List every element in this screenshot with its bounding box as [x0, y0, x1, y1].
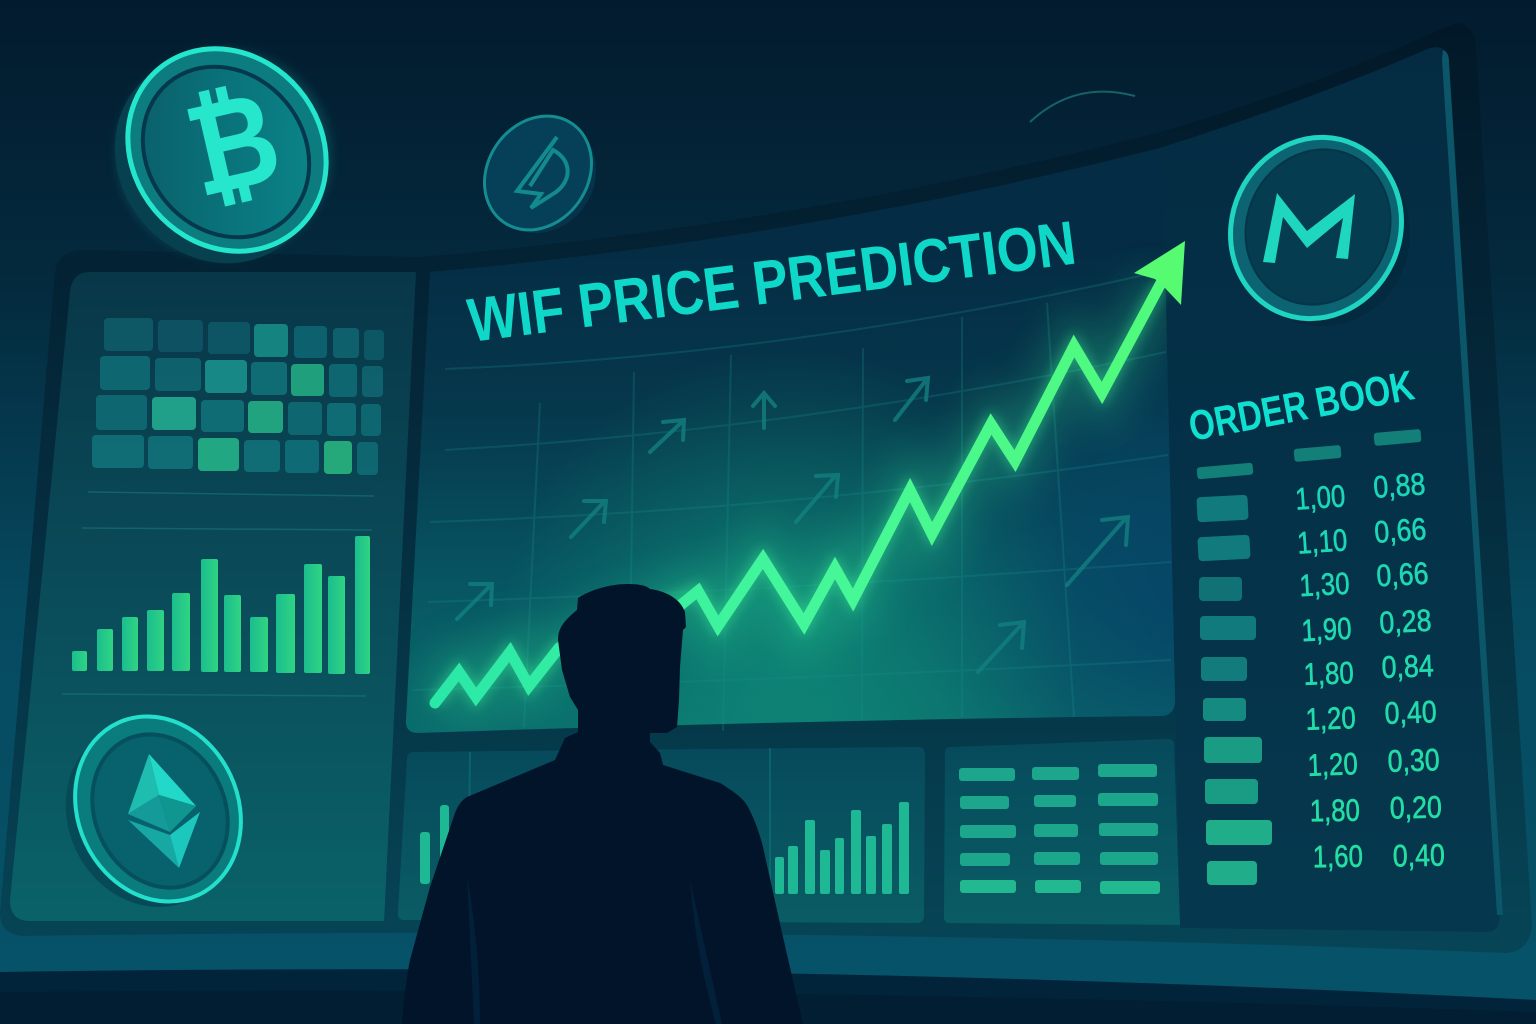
- icon: bitcoin coin: [73, 8, 367, 304]
- column header bars: [1197, 429, 1422, 479]
- small rising arrows: [457, 378, 1128, 672]
- right edge highlight: [1442, 50, 1503, 915]
- left bar chart: [72, 536, 370, 674]
- order book numbers: 1,60: [1313, 839, 1363, 874]
- order book numbers: 1,90: [1301, 611, 1352, 648]
- chart grid lines: [412, 270, 1171, 731]
- order book numbers: 1,80: [1310, 793, 1360, 828]
- trend line with arrow: [435, 241, 1185, 703]
- table rows: [959, 764, 1160, 894]
- jacket seams: [467, 875, 722, 1024]
- order book numbers: 1,10: [1296, 522, 1348, 561]
- trend line blur: [435, 283, 1161, 703]
- order book numbers: 0,66: [1373, 511, 1427, 550]
- order book numbers: 0,40: [1393, 838, 1445, 873]
- order book numbers: 1,20: [1305, 700, 1356, 737]
- order book numbers: 0,40: [1384, 694, 1437, 731]
- order book numbers: 0,28: [1379, 603, 1432, 640]
- title: WIF PRICE PREDICTION: [464, 209, 1080, 356]
- icon: monero coin: [1201, 109, 1431, 347]
- order book numbers: 0,84: [1381, 648, 1434, 685]
- floor: [0, 969, 1536, 1024]
- panel: left column: [10, 272, 416, 935]
- icon: ethereum coin: [36, 689, 271, 935]
- order book depth bars: [1196, 495, 1272, 885]
- panel: main screen area: [430, 47, 1500, 932]
- order book numbers: 0,88: [1372, 466, 1426, 505]
- panel: lower bar chart: [398, 747, 925, 923]
- order book numbers: 1,30: [1299, 566, 1350, 603]
- panel: price chart: [406, 272, 1175, 733]
- icon: bitcoin coin: ₿: [174, 65, 292, 224]
- floor lower band: [0, 991, 1536, 1024]
- heatmap grid: [92, 318, 384, 475]
- order book numbers: [1294, 466, 1445, 874]
- trend line glow: [435, 283, 1161, 703]
- person silhouette: [402, 584, 803, 1024]
- order book numbers: 0,66: [1376, 556, 1429, 593]
- lower bars: [420, 802, 909, 894]
- order book numbers: 0,30: [1387, 742, 1440, 779]
- order book numbers: 0,20: [1390, 790, 1442, 825]
- icon: faint coin: [463, 95, 618, 255]
- order book heading: ORDER BOOK: [1185, 361, 1418, 450]
- panel: lower table: [944, 739, 1180, 925]
- faint sweep line in the background: [1030, 92, 1135, 122]
- order book numbers: 1,00: [1294, 478, 1346, 517]
- panel: order book: [1185, 361, 1445, 885]
- order book numbers: 1,80: [1303, 655, 1354, 692]
- order book numbers: 1,20: [1307, 746, 1358, 783]
